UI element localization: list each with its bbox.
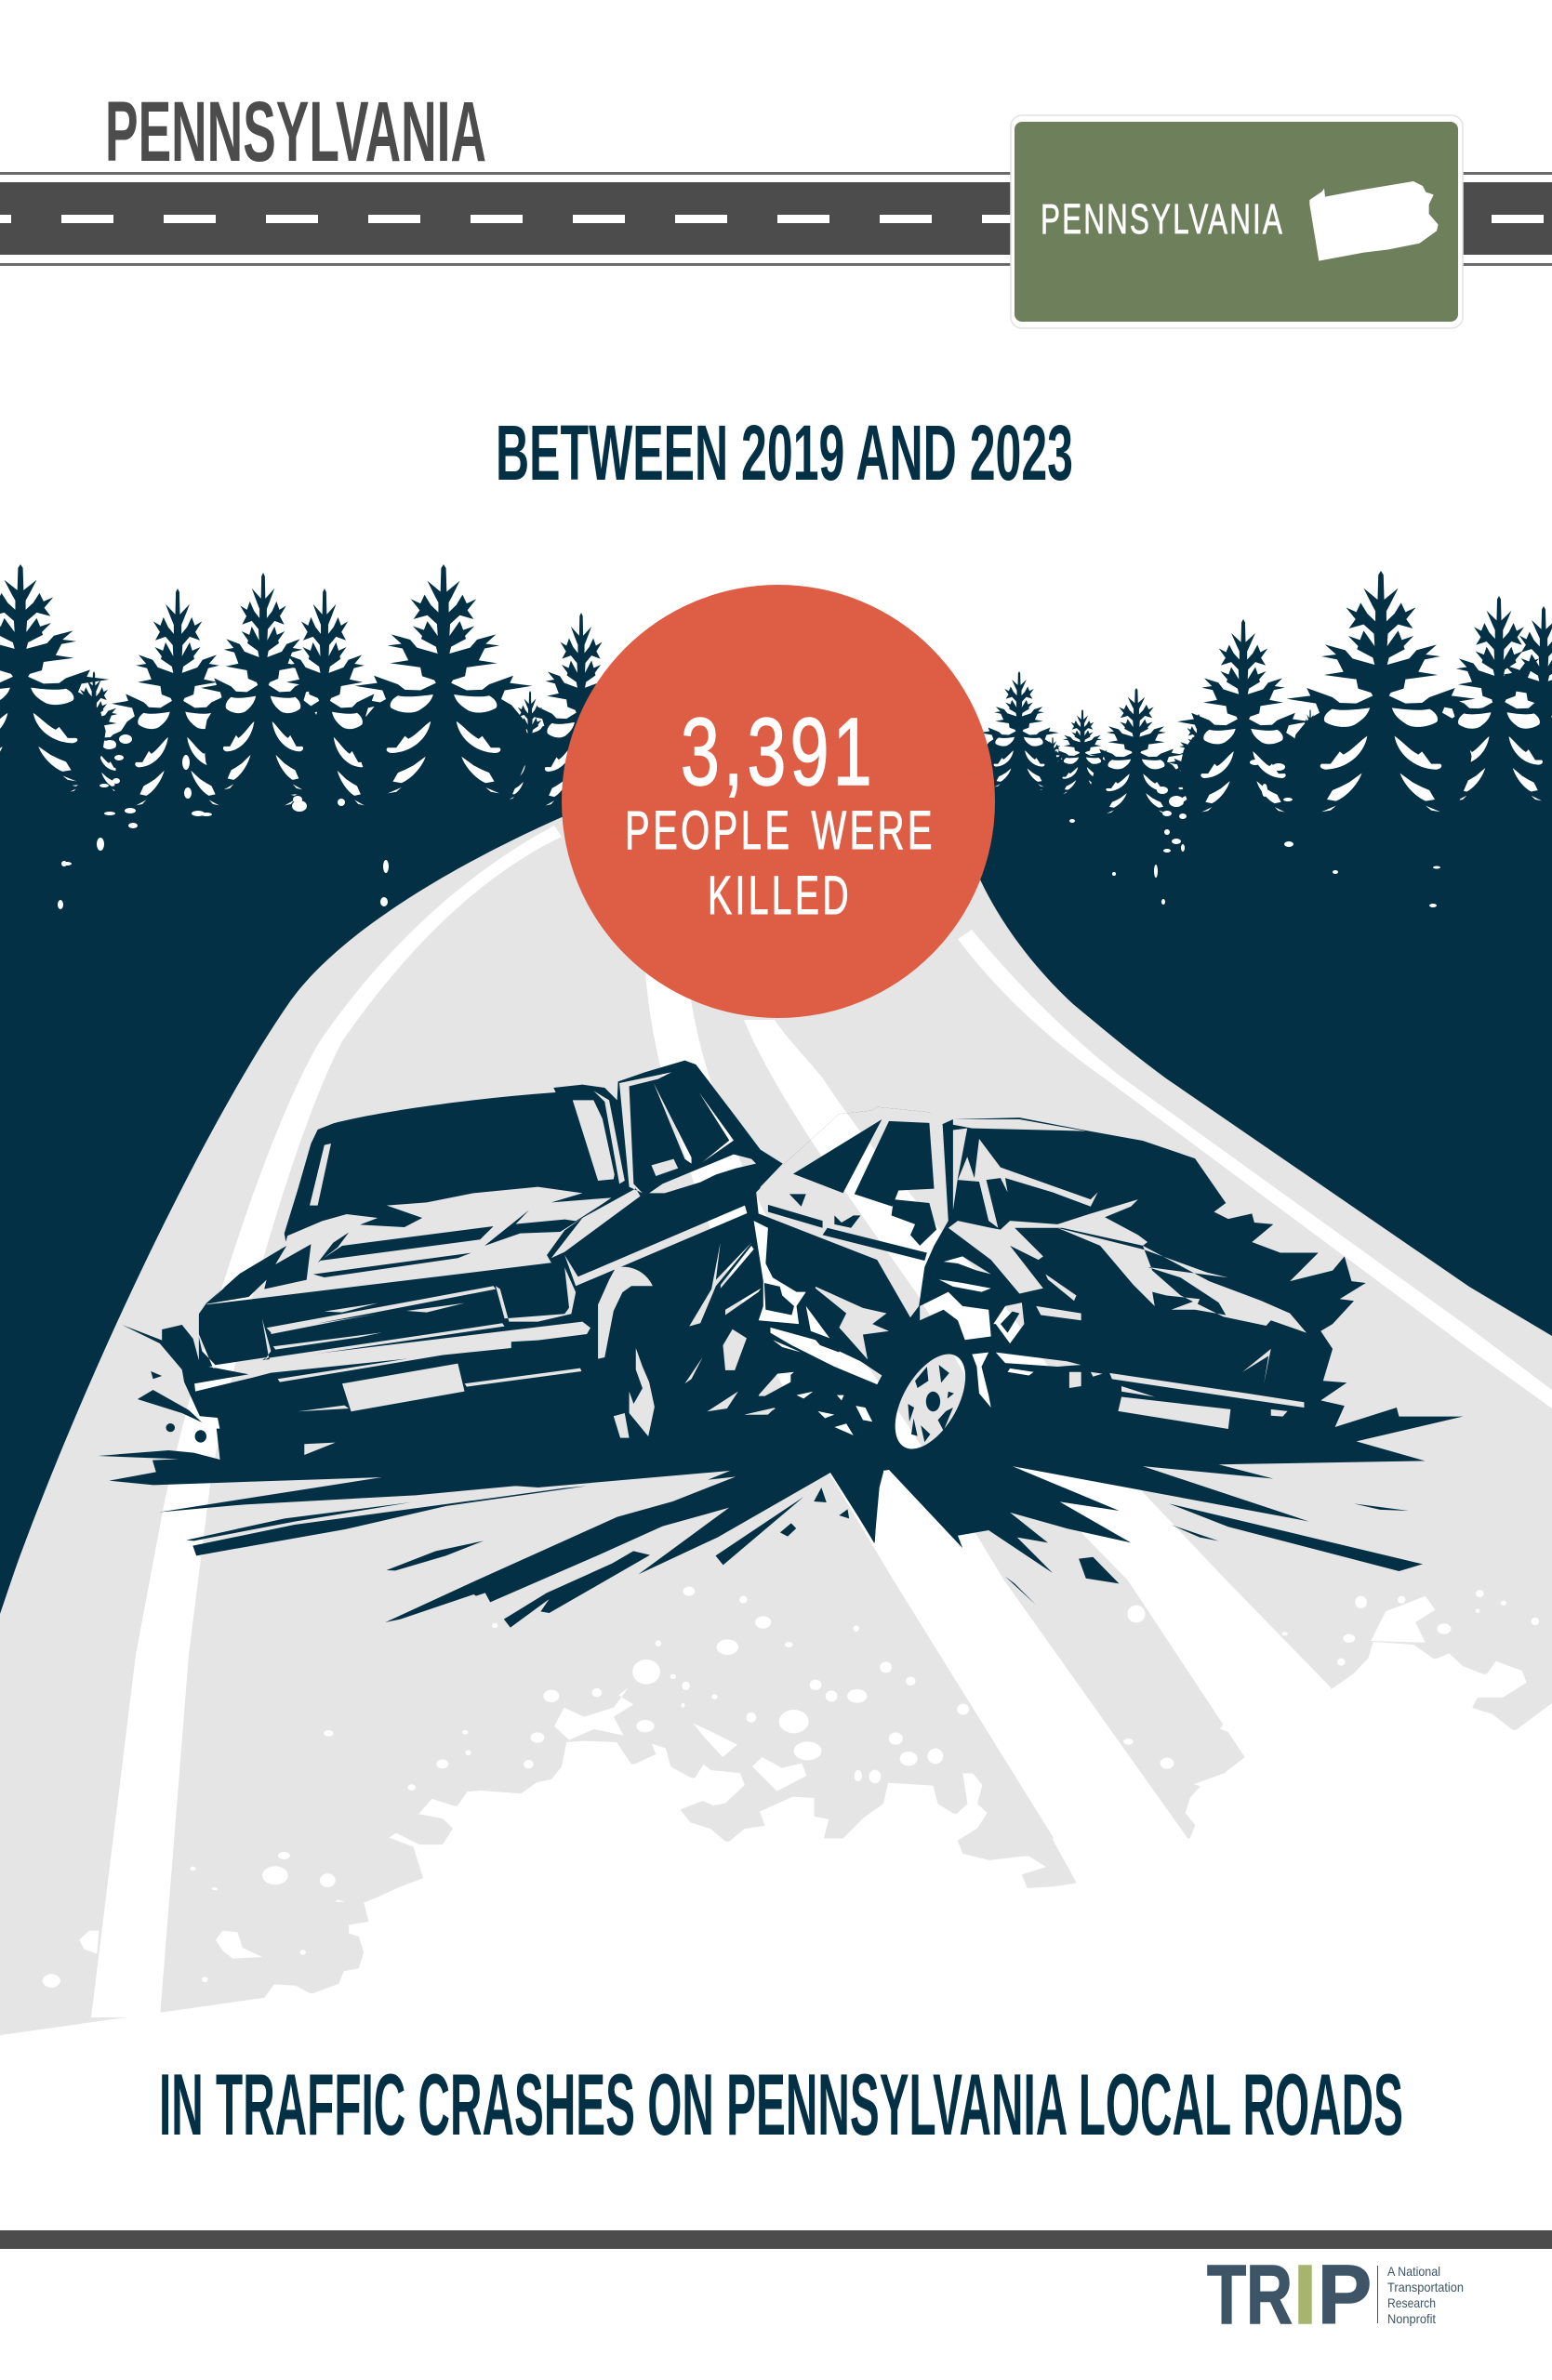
statistic label line 1: PEOPLE WERE [625,800,935,861]
sign label: PENNSYLVANIA [1041,195,1284,243]
statistic label line 2: KILLED [708,866,852,926]
TRIP logo [1207,2249,1464,2342]
TRIP logo: A National [1387,2264,1440,2279]
road markings [91,826,1552,2017]
statistic number: 3,391 [681,698,876,805]
forest illustration [0,564,1552,1618]
TRIP logo: P [1318,2249,1372,2342]
highway road band [0,172,1552,266]
TRIP logo: Research [1387,2295,1436,2310]
red statistic circle [562,585,995,1018]
TRIP logo: Transportation [1387,2280,1464,2294]
icon: Pennsylvania state outline [1309,181,1439,261]
heading: between 2019 and 2023: BETWEEN 2019 AND 2023 [496,409,1073,496]
TRIP logo: TR [1207,2249,1293,2342]
illustration: two crashed cars with debris [99,1060,1464,1628]
footer bar [0,2230,1552,2249]
road surface [0,817,1552,2034]
TRIP logo: Nonprofit [1387,2311,1436,2326]
road splatter wear [43,1587,1539,1988]
highway sign [1011,115,1463,328]
title: Pennsylvania: PENNSYLVANIA [105,85,486,179]
TRIP logo: I [1293,2249,1317,2342]
